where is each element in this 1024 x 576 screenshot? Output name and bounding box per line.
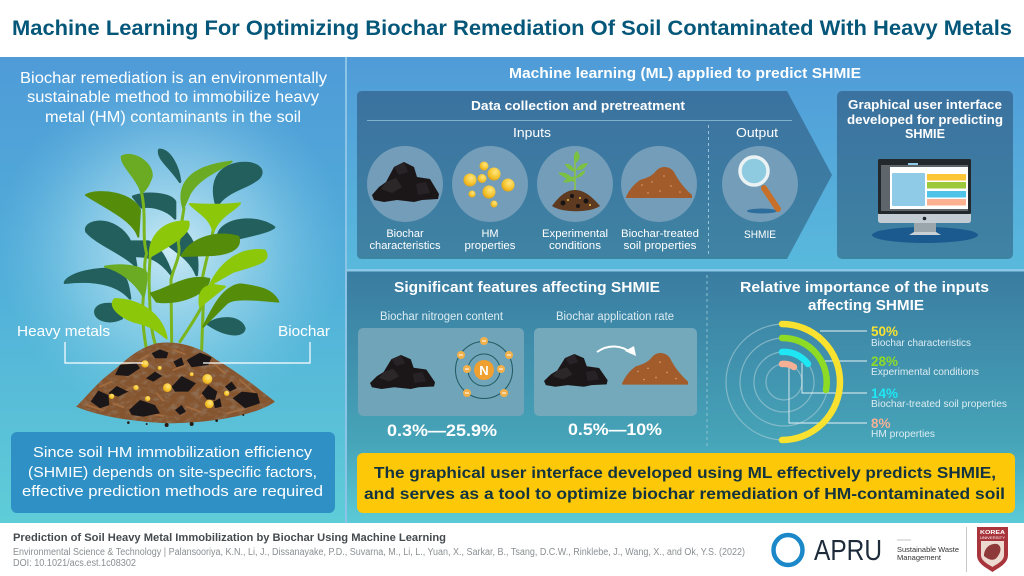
- logo: sustainable waste management: Sustainable Waste: [897, 545, 959, 554]
- heading: relative importance: [740, 279, 989, 314]
- intro text: Biochar remediation is an environmentally: [20, 70, 327, 87]
- input: experimental conditions: conditions: [549, 240, 602, 252]
- label: heavy metals: [17, 324, 143, 363]
- legend: relative importance values: HM properties: [871, 428, 935, 440]
- icon: nitrogen atom: [456, 337, 513, 398]
- legend: relative importance values: Experimental conditions: [871, 366, 979, 378]
- icon: computer monitor: [872, 159, 978, 243]
- logo: Korea University crest: KOREA: [980, 530, 1005, 536]
- label: heavy metals: Heavy metals: [17, 324, 110, 340]
- legend: relative importance values: Biochar-treated soil properties: [871, 398, 1007, 410]
- feature: biochar nitrogen content: Biochar nitrogen content: [380, 311, 504, 323]
- legend: relative importance values: 28%: [871, 354, 898, 369]
- arrow panel: data collection and pretreatment: [357, 91, 832, 259]
- legend: relative importance values: [871, 324, 1007, 440]
- legend: relative importance values: 8%: [871, 416, 891, 431]
- chart: radial bar chart: [726, 324, 867, 440]
- callout: prediction methods: Since soil HM immobilization efficiency: [33, 445, 313, 461]
- feature: biochar nitrogen content: 0.3%—25.9%: [387, 422, 497, 440]
- intro text: metal (HM) contaminants in the soil: [45, 109, 301, 126]
- title: Machine Learning For Optimizing Biochar Remediation Of Soil Contaminated With Heavy Metals: [12, 17, 1012, 40]
- logo: APRU: [774, 535, 882, 567]
- input: biochar-treated soil properties: soil properties: [624, 240, 697, 252]
- illustration: soil mound with biochar and heavy metals: [76, 342, 275, 427]
- callout: conclusion: [357, 453, 1015, 513]
- legend: relative importance values: Biochar characteristics: [871, 337, 971, 349]
- panel: graphical user interface: developed for predicting: [847, 113, 1003, 127]
- feature: biochar application rate: [534, 311, 697, 439]
- logo: Korea University crest: UNIVERSITY: [980, 536, 1006, 540]
- input: experimental conditions: [537, 146, 613, 252]
- input: biochar characteristics: [367, 146, 443, 252]
- callout: prediction methods: (SHMIE) depends on site-specific factors,: [28, 465, 317, 481]
- label: biochar: Biochar: [278, 324, 330, 340]
- footer: [0, 523, 1024, 576]
- citation: Environmental Science & Technology | Palansooriya, K.N., Li, J., Dissanayake, P.D., Suvarna, M., Li, L., Yuan, X., Sarkar, B., Tsang, D.C.W., Rinklebe, J., Wang, X., and Ok, Y.S. (2022): [13, 547, 745, 558]
- legend: relative importance values: 14%: [871, 386, 898, 401]
- feature: biochar application rate: 0.5%—10%: [568, 421, 662, 439]
- legend: relative importance values: 50%: [871, 324, 898, 339]
- input: experimental conditions: Experimental: [542, 228, 608, 240]
- citation: DOI: 10.1021/acs.est.1c08302: [13, 558, 136, 569]
- logo: APRU: APRU: [814, 535, 882, 567]
- illustration: plant: [65, 150, 278, 350]
- intro text: [20, 70, 327, 126]
- arrow panel: data collection and pretreatment: Inputs: [513, 125, 552, 140]
- arrow: apply biochar: [597, 346, 636, 356]
- label: biochar: [203, 324, 330, 363]
- panel: graphical user interface: SHMIE: [905, 127, 945, 141]
- arrow panel: data collection and pretreatment: Data collection and pretreatment: [471, 98, 686, 113]
- input: HM properties: properties: [464, 240, 516, 252]
- header band: [0, 0, 1024, 57]
- panel: graphical user interface: [837, 91, 1013, 259]
- arrow panel: data collection and pretreatment: Output: [736, 125, 778, 140]
- callout: conclusion: and serves as a tool to optimize biochar remediation of HM-contaminated soil: [364, 486, 1005, 503]
- heading: relative importance: affecting SHMIE: [808, 297, 924, 314]
- feature: biochar application rate: Biochar application rate: [556, 311, 674, 323]
- callout: prediction methods: effective prediction methods are required: [22, 484, 323, 500]
- input: HM properties: HM: [481, 228, 499, 240]
- input: biochar-treated soil properties: [621, 146, 699, 252]
- intro text: sustainable method to immobilize heavy: [27, 89, 319, 106]
- panel: significant features and relative importance: [347, 269, 1024, 523]
- output: SHMIE magnifier: [722, 146, 798, 241]
- callout: prediction methods: [11, 432, 335, 513]
- citation: [13, 532, 745, 569]
- feature: biochar nitrogen content: [358, 311, 524, 440]
- input: biochar characteristics: characteristics: [370, 240, 441, 252]
- logo: Korea University crest: [977, 527, 1008, 572]
- citation: Prediction of Soil Heavy Metal Immobilization by Biochar Using Machine Learning: [13, 532, 446, 544]
- heading: relative importance: Relative importance of the inputs: [740, 279, 989, 296]
- panel: graphical user interface: Graphical user interface: [848, 98, 1002, 112]
- input: biochar characteristics: Biochar: [386, 228, 424, 240]
- logo: sustainable waste management: Management: [897, 553, 942, 562]
- icon: nitrogen atom: N: [479, 363, 489, 378]
- logo: sustainable waste management: [897, 540, 959, 562]
- heading: significant features: Significant features affecting SHMIE: [394, 279, 660, 296]
- heading: machine learning: Machine learning (ML) applied to predict SHMIE: [509, 65, 861, 82]
- callout: conclusion: The graphical user interface developed using ML effectively predicts SHMIE,: [374, 465, 996, 482]
- input: HM properties: [452, 146, 528, 252]
- panel: left biochar remediation: [0, 57, 345, 523]
- output: SHMIE magnifier: SHMIE: [744, 229, 776, 241]
- input: biochar-treated soil properties: Biochar-treated: [621, 228, 699, 240]
